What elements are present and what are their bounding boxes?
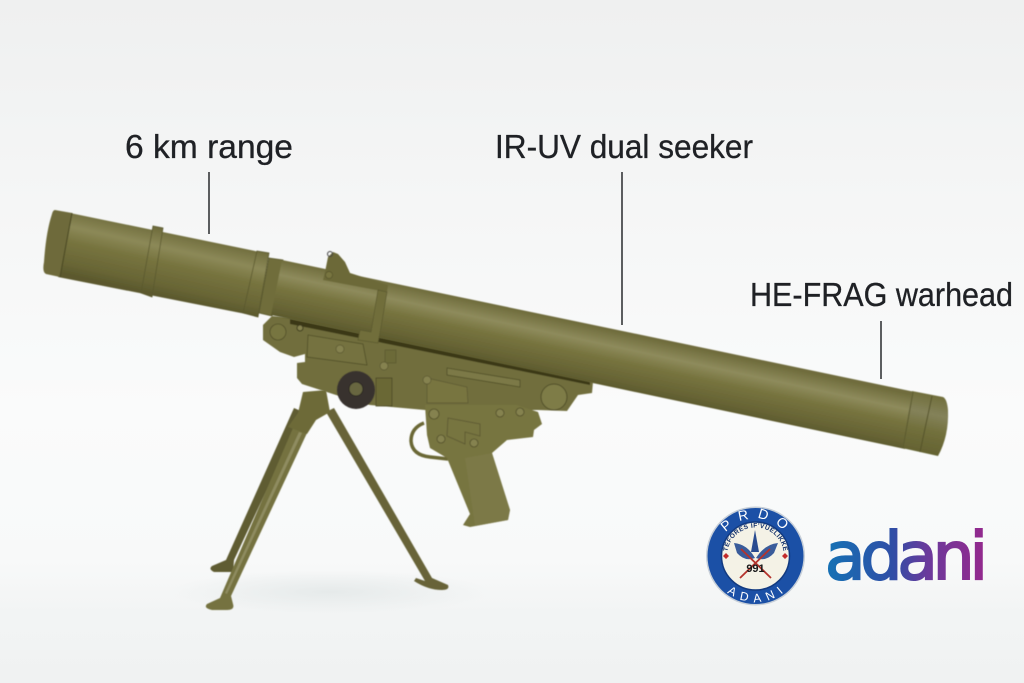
main tube [271, 260, 915, 449]
sight bracket [323, 252, 388, 292]
front leg [206, 428, 307, 610]
right leg [326, 408, 448, 590]
floor shadow [170, 570, 490, 614]
tube clamp [358, 290, 387, 343]
logo: emblem: 991 [746, 563, 765, 575]
bipod [206, 390, 448, 610]
trigger guard [411, 423, 448, 459]
logo: emblem [706, 506, 805, 606]
collar [259, 258, 283, 316]
rear leg [210, 408, 303, 572]
emblem wings [734, 543, 778, 559]
band 1 [141, 226, 163, 297]
emblem ring text: PRDO [720, 508, 788, 532]
rear end cap [902, 391, 948, 456]
muzzle cap [43, 210, 72, 277]
logo: adani: adani [825, 518, 983, 595]
elevation knob [337, 371, 375, 409]
band 2 [243, 251, 269, 317]
label: IR-UV dual seeker: IR-UV dual seeker [495, 128, 753, 165]
rivets [270, 324, 286, 340]
launcher mechanism [263, 316, 593, 527]
front section [58, 213, 260, 314]
launcher tube [43, 210, 948, 456]
side plates [307, 335, 367, 365]
bipod collar [288, 390, 330, 434]
receiver body [263, 316, 593, 411]
logo: emblem: ADANI [727, 586, 783, 602]
pistol grip [425, 405, 542, 527]
label: 6 km range: 6 km range [125, 128, 293, 165]
dark gap under tube [290, 319, 590, 385]
logo: emblem: TEFORES IF'VUELIKKE [723, 523, 788, 551]
